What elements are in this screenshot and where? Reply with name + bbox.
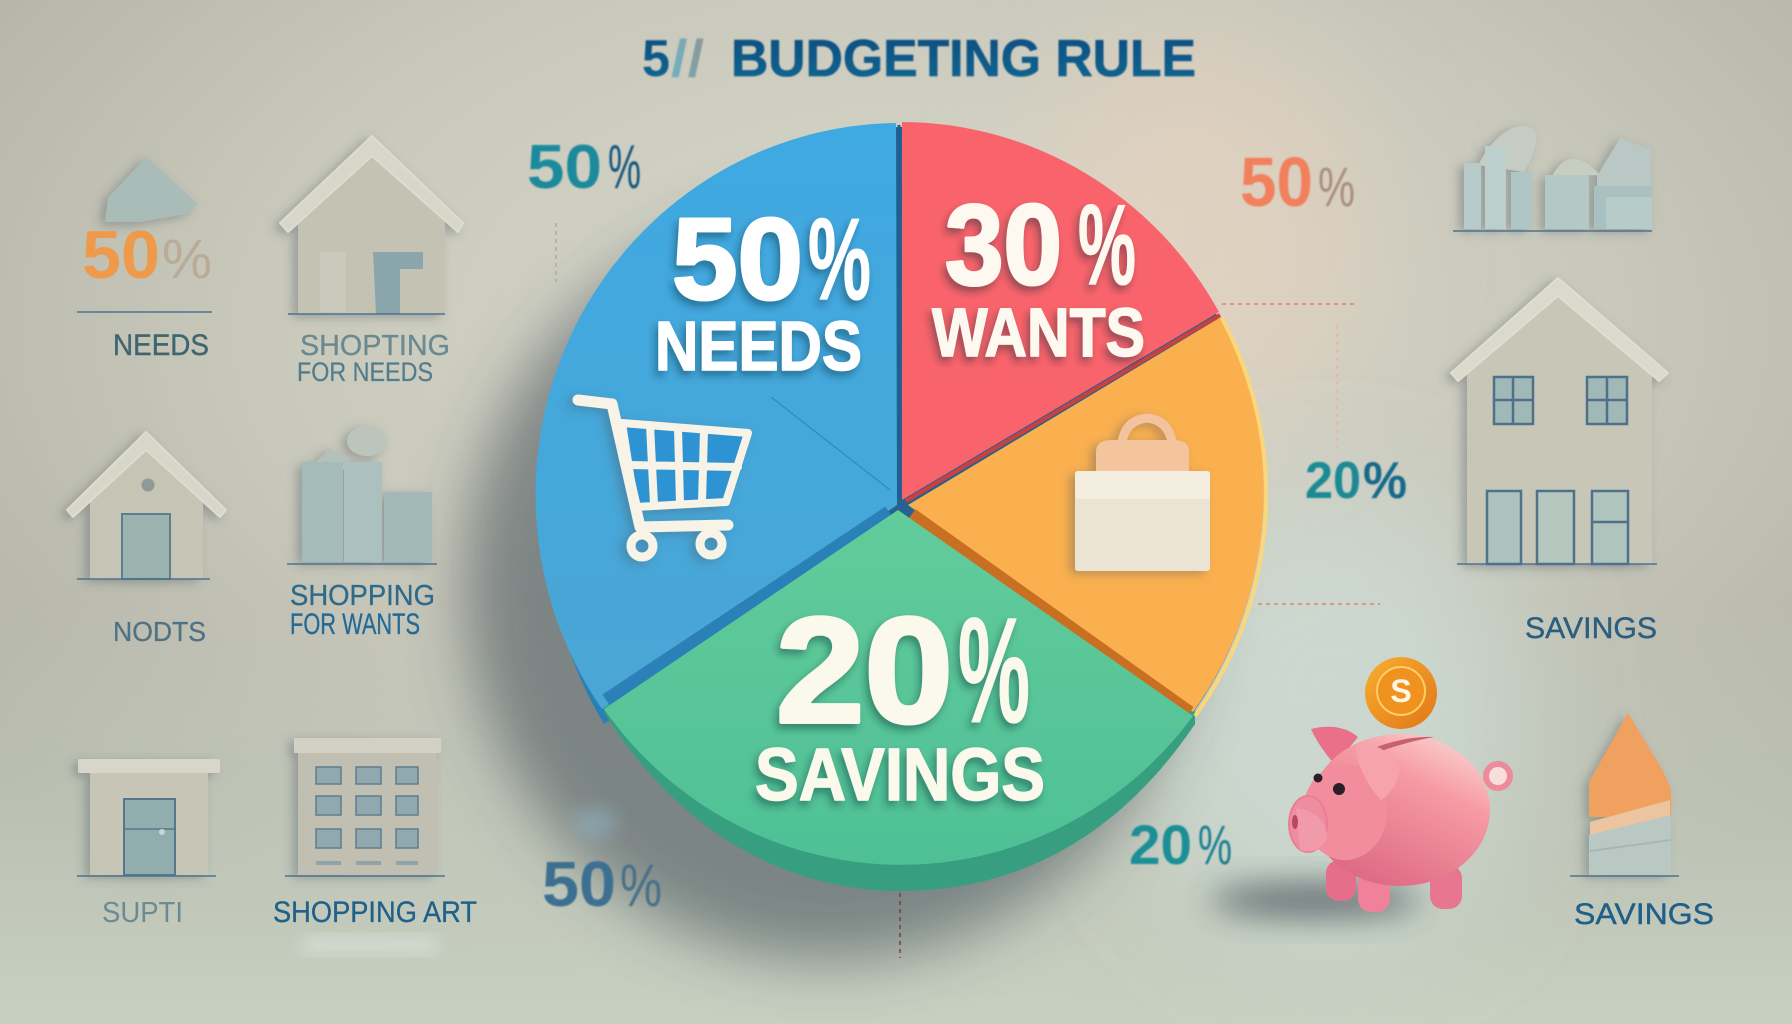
callout: 20% bottom right bbox=[1129, 813, 1232, 876]
title: BUDGETING RULE bbox=[731, 30, 1196, 88]
pie side depth bbox=[537, 127, 1263, 891]
left item 6: building bbox=[273, 738, 477, 953]
dashed leader lines bbox=[556, 223, 1380, 958]
label: shopping for wants bbox=[290, 580, 435, 641]
pie label: 50% needs: % bbox=[808, 194, 871, 324]
icon: stacked shape bbox=[1589, 713, 1671, 875]
pie label: 30% wants: 30 bbox=[945, 182, 1062, 309]
pie label: 20% savings bbox=[755, 586, 1045, 816]
label: nodts: NODTS bbox=[113, 616, 206, 647]
right item: house bbox=[1451, 278, 1668, 645]
slice edges bbox=[606, 125, 1220, 712]
label: shopping for needs bbox=[297, 330, 450, 387]
icon: paper shape bbox=[105, 157, 198, 222]
pie label: 50% needs: 50 bbox=[672, 194, 803, 324]
pie chart bbox=[536, 122, 1266, 891]
title: 5 bbox=[642, 30, 670, 88]
callout: 20% right bbox=[1305, 452, 1407, 510]
slice: savings bbox=[604, 510, 1193, 865]
slice: other bbox=[908, 317, 1264, 712]
icon: garage bbox=[78, 759, 220, 875]
icon: coin: S bbox=[1390, 673, 1412, 709]
callout: 50% top right bbox=[1240, 143, 1355, 221]
piggy bank with coin bbox=[1210, 657, 1510, 917]
icon: shopping cart bbox=[578, 400, 748, 557]
label: shopping for wants: FOR WANTS bbox=[290, 608, 420, 641]
callout: 20% right: 20 bbox=[1305, 452, 1361, 510]
left item 5: garage bbox=[77, 759, 220, 929]
pie label: 20% savings: % bbox=[958, 586, 1030, 754]
icon: pig bbox=[1289, 727, 1510, 912]
left item 4: gift boxes bbox=[287, 426, 437, 641]
slice: wants bbox=[902, 122, 1219, 500]
icon: house bbox=[280, 136, 463, 314]
label: supti: SUPTI bbox=[102, 897, 183, 929]
callout: 50% bottom left: % bbox=[620, 852, 662, 919]
label: 50% orange: % bbox=[162, 227, 212, 290]
icon: two storey house bbox=[1451, 278, 1668, 564]
icon: small house bbox=[67, 432, 226, 579]
right item: bar shape bbox=[1570, 713, 1714, 931]
pie label: 30% wants: % bbox=[1078, 182, 1136, 309]
callout: 50% top left bbox=[527, 133, 641, 202]
label: savings: SAVINGS bbox=[1574, 898, 1714, 931]
pie label: 50% needs bbox=[655, 194, 871, 385]
left item 2: house bbox=[280, 136, 463, 387]
callout: 50% bottom left bbox=[542, 807, 662, 920]
title: // bbox=[671, 30, 704, 88]
left item 1: needs bbox=[77, 157, 212, 362]
label: shopping for wants: SHOPPING bbox=[290, 580, 435, 612]
callout: 50% top left: 50 bbox=[527, 133, 602, 202]
pie label: 50% needs: NEEDS bbox=[655, 307, 862, 385]
pie shadow bbox=[465, 210, 1195, 960]
label: 50% orange: 50 bbox=[82, 217, 160, 293]
icon: boxes bbox=[302, 426, 432, 562]
icon: coin bbox=[1365, 657, 1437, 729]
label: needs: NEEDS bbox=[113, 329, 209, 362]
icon: shopping bag bbox=[1075, 418, 1210, 571]
pie label: 30% wants bbox=[932, 182, 1145, 371]
icon: buildings cluster bbox=[1464, 126, 1652, 229]
label: shopping for needs: SHOPTING bbox=[300, 330, 450, 362]
label: savings: SAVINGS bbox=[1525, 612, 1657, 645]
callout: 50% top right: 50 bbox=[1240, 143, 1313, 221]
callout: 50% top right: % bbox=[1318, 155, 1355, 218]
label: 50% orange bbox=[82, 217, 212, 293]
pie label: 20% savings: 20 bbox=[776, 586, 953, 754]
pie label: 20% savings: SAVINGS bbox=[755, 733, 1045, 816]
callout: 20% bottom right: 20 bbox=[1129, 813, 1192, 876]
label: shopping art: SHOPPING ART bbox=[273, 896, 477, 929]
label: shopping for needs: FOR NEEDS bbox=[297, 357, 433, 387]
slice: needs bbox=[536, 123, 897, 709]
callout: 20% right: % bbox=[1363, 452, 1407, 510]
icon: building bbox=[294, 738, 441, 875]
right item: buildings bbox=[1453, 126, 1652, 231]
callout: 20% bottom right: % bbox=[1198, 813, 1232, 876]
callout: 50% bottom left: 50 bbox=[542, 848, 616, 920]
callout: 50% top left: % bbox=[608, 133, 641, 202]
pig shadow bbox=[1210, 883, 1420, 917]
left item 3: house bbox=[67, 432, 226, 647]
pie label: 30% wants: WANTS bbox=[932, 294, 1145, 371]
